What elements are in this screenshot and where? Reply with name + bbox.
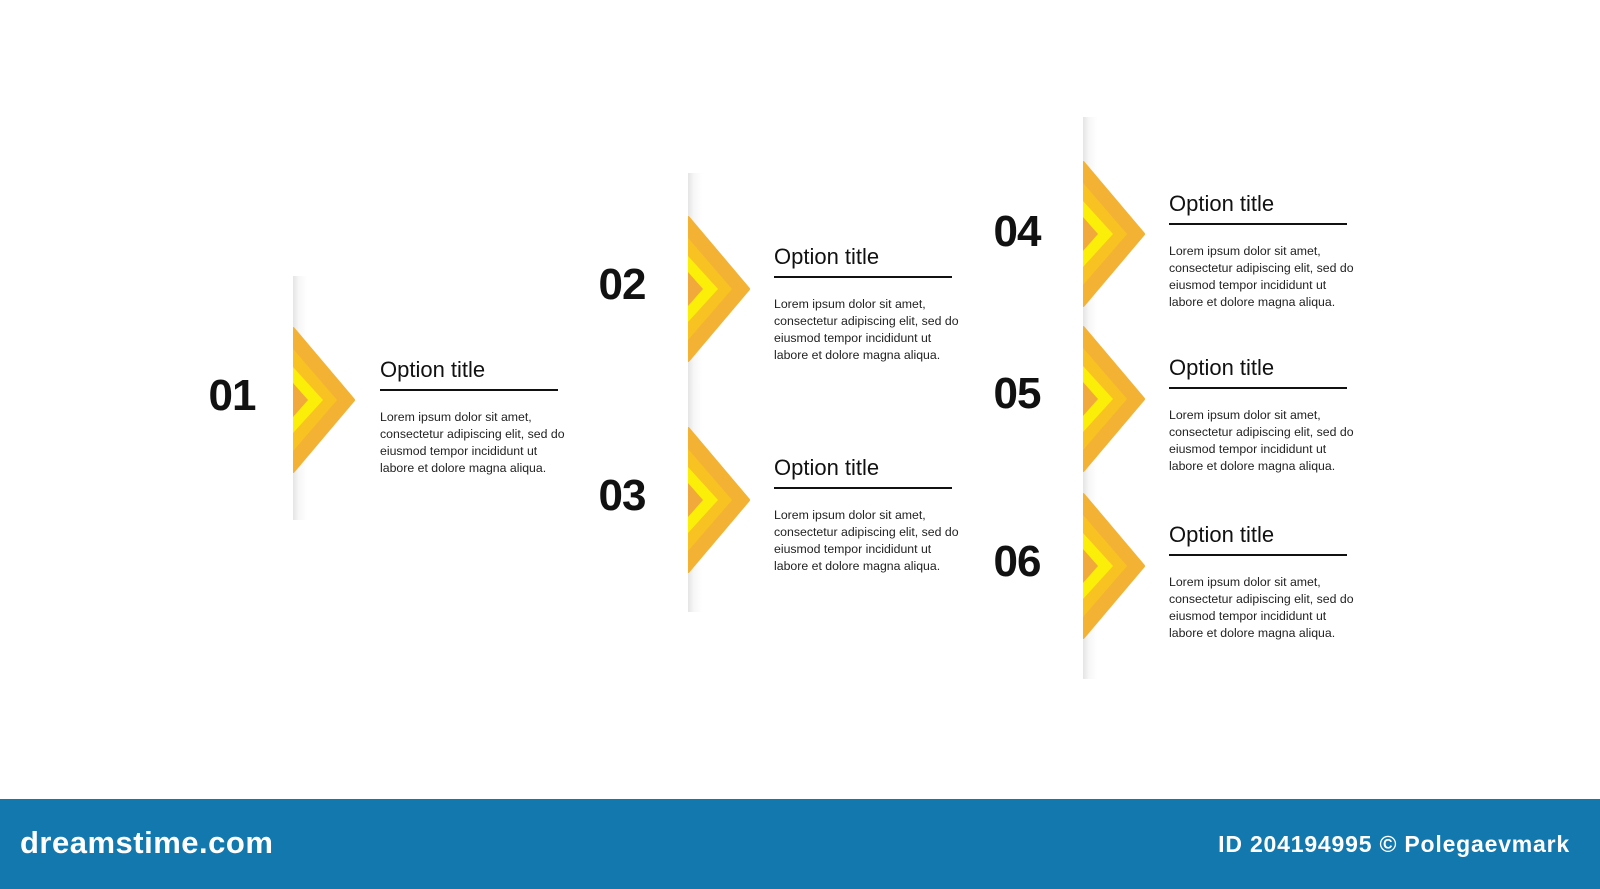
number 02: 02 <box>599 260 645 309</box>
text 05: labore et dolore magna aliqua. <box>1169 459 1335 473</box>
number 04: 04 <box>994 207 1040 256</box>
text 04: eiusmod tempor incididunt ut <box>1169 278 1326 292</box>
footer logo: dreamstime.com <box>20 825 273 860</box>
chevron 02 <box>688 216 750 362</box>
chevron 03 <box>688 427 750 573</box>
text 03: Option title <box>774 455 879 480</box>
text 01: eiusmod tempor incididunt ut <box>380 444 537 458</box>
number 05: 05 <box>994 369 1040 418</box>
text 02: Lorem ipsum dolor sit amet, <box>774 297 926 311</box>
text 05: Lorem ipsum dolor sit amet, <box>1169 408 1321 422</box>
text 02: Option title <box>774 244 879 269</box>
number 03: 03 <box>599 471 645 520</box>
text 02: eiusmod tempor incididunt ut <box>774 331 931 345</box>
text 02 <box>774 244 959 362</box>
item 01 <box>209 327 565 475</box>
panel 1 shadow line <box>293 276 307 520</box>
text 05: consectetur adipiscing elit, sed do <box>1169 425 1354 439</box>
panel 3 shadow line <box>1083 117 1097 679</box>
text 04 <box>1169 191 1354 309</box>
item 05 <box>994 326 1354 473</box>
text 01: consectetur adipiscing elit, sed do <box>380 427 565 441</box>
item 06 <box>994 493 1354 640</box>
text 04: consectetur adipiscing elit, sed do <box>1169 261 1354 275</box>
text 06 <box>1169 522 1354 640</box>
text 04: labore et dolore magna aliqua. <box>1169 295 1335 309</box>
chevron 05 <box>1083 326 1145 472</box>
text 02: labore et dolore magna aliqua. <box>774 348 940 362</box>
text 06: consectetur adipiscing elit, sed do <box>1169 592 1354 606</box>
text 05: eiusmod tempor incididunt ut <box>1169 442 1326 456</box>
text 02: consectetur adipiscing elit, sed do <box>774 314 959 328</box>
chevron 04 <box>1083 161 1145 307</box>
text 01: Option title <box>380 357 485 382</box>
item 03 <box>599 427 959 573</box>
chevron 06 <box>1083 493 1145 639</box>
text 06: Option title <box>1169 522 1274 547</box>
item 02 <box>599 216 959 362</box>
text 01 <box>380 357 565 475</box>
text 03 <box>774 455 959 573</box>
chevron 01 <box>293 327 355 473</box>
text 03: labore et dolore magna aliqua. <box>774 559 940 573</box>
text 04: Lorem ipsum dolor sit amet, <box>1169 244 1321 258</box>
text 03: consectetur adipiscing elit, sed do <box>774 525 959 539</box>
text 06: eiusmod tempor incididunt ut <box>1169 609 1326 623</box>
text 06: labore et dolore magna aliqua. <box>1169 626 1335 640</box>
text 06: Lorem ipsum dolor sit amet, <box>1169 575 1321 589</box>
footer id: ID 204194995 © Polegaevmark <box>1218 831 1570 857</box>
text 01: Lorem ipsum dolor sit amet, <box>380 410 532 424</box>
text 04: Option title <box>1169 191 1274 216</box>
text 03: eiusmod tempor incididunt ut <box>774 542 931 556</box>
number 06: 06 <box>994 537 1040 586</box>
text 01: labore et dolore magna aliqua. <box>380 461 546 475</box>
text 05 <box>1169 355 1354 473</box>
text 05: Option title <box>1169 355 1274 380</box>
text 03: Lorem ipsum dolor sit amet, <box>774 508 926 522</box>
number 01: 01 <box>209 371 255 420</box>
item 04 <box>994 161 1354 309</box>
panel 2 shadow line <box>688 173 702 612</box>
footer banner <box>0 799 1600 889</box>
